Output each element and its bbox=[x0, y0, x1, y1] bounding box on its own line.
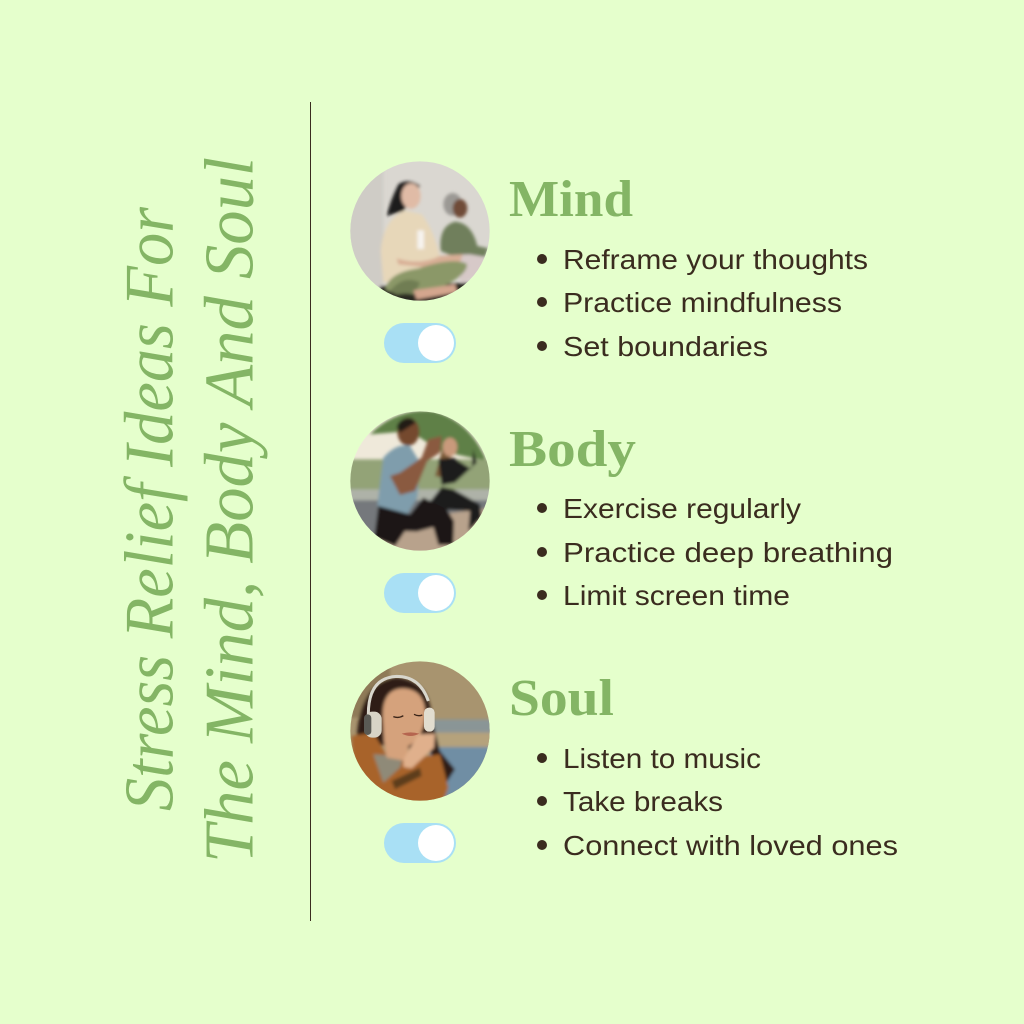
title: Stress Relief Ideas For The Mind, Body And Soul bbox=[112, 157, 268, 863]
panel: soul bbox=[340, 651, 898, 863]
title: Stress Relief Ideas For The Mind, Body And Soul: Stress Relief Ideas For bbox=[112, 206, 188, 811]
list: body ideas bbox=[537, 493, 893, 611]
panel: mind bbox=[340, 151, 868, 363]
heading: Soul: Soul bbox=[509, 670, 614, 727]
list: mind ideas: Practice mindfulness bbox=[563, 287, 842, 318]
list: body ideas: Practice deep breathing bbox=[563, 537, 893, 568]
panel: body bbox=[340, 401, 893, 613]
toggle switch bbox=[384, 573, 456, 613]
list: mind ideas: Reframe your thoughts bbox=[563, 244, 868, 275]
list: soul ideas: Listen to music bbox=[563, 743, 761, 774]
title: Stress Relief Ideas For The Mind, Body And Soul: The Mind, Body And Soul bbox=[192, 157, 268, 863]
list: body ideas: Exercise regularly bbox=[563, 493, 801, 524]
toggle switch bbox=[384, 823, 456, 863]
heading: Body: Body bbox=[509, 421, 636, 478]
list: body ideas: Limit screen time bbox=[563, 580, 790, 611]
heading: Mind: Mind bbox=[509, 171, 633, 228]
photo: man and woman exercising outdoors bbox=[350, 411, 490, 551]
list: mind ideas bbox=[537, 244, 868, 362]
list: soul ideas bbox=[537, 743, 898, 861]
list: soul ideas: Connect with loved ones bbox=[563, 830, 898, 861]
photo: two women meditating bbox=[350, 161, 490, 301]
list: mind ideas: Set boundaries bbox=[563, 331, 768, 362]
toggle switch bbox=[384, 323, 456, 363]
list: soul ideas: Take breaks bbox=[563, 786, 723, 817]
photo: woman listening to music on headphones bbox=[350, 661, 490, 801]
